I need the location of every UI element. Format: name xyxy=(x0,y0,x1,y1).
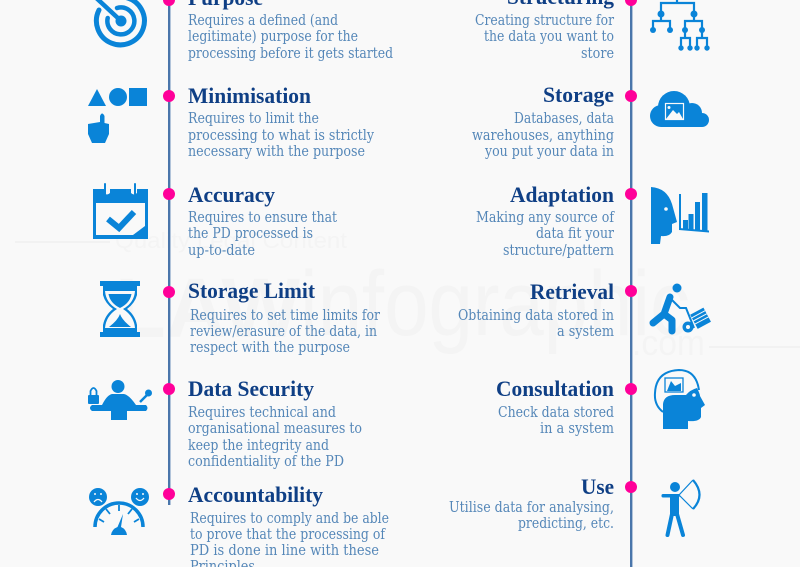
item: Adaptation: Adaptation xyxy=(510,182,614,207)
item: Structuring xyxy=(475,0,615,62)
item: Adaptation: Making any source of xyxy=(476,208,615,226)
item: Purpose: processing before it gets started xyxy=(188,44,393,62)
item: Use xyxy=(449,474,614,532)
item: Storage Limit xyxy=(188,278,381,356)
icon: gauge with faces xyxy=(89,488,149,535)
item: Storage Limit: Storage Limit xyxy=(188,278,315,303)
item: Accountability: Requires to comply and be able xyxy=(190,509,389,527)
item: Accountability: to prove that the processing of xyxy=(190,525,386,543)
item: Accuracy: the PD processed is xyxy=(188,224,313,242)
item: Adaptation xyxy=(476,182,615,259)
item: Consultation: Consultation xyxy=(496,376,614,401)
item: Accountability: Accountability xyxy=(188,482,324,507)
item: Storage: Storage xyxy=(543,82,614,107)
item: Retrieval: Retrieval xyxy=(530,279,614,304)
icon: cloud with image xyxy=(650,91,709,127)
item: Storage Limit: respect with the purpose xyxy=(190,338,350,356)
item: Structuring: store xyxy=(581,44,614,62)
icon: hourglass xyxy=(100,281,140,337)
watermark: .com xyxy=(632,322,705,363)
item: Purpose: legitimate) purpose for the xyxy=(188,27,358,45)
watermark: LAW xyxy=(115,261,301,355)
item: Accuracy xyxy=(188,182,337,259)
item: Retrieval: Obtaining data stored in xyxy=(458,306,614,324)
item: Minimisation: processing to what is strictly xyxy=(188,126,374,144)
item: Adaptation: data fit your xyxy=(536,224,615,242)
left timeline xyxy=(163,0,175,505)
item: Data Security: keep the integrity and xyxy=(188,436,329,454)
item: Use: predicting, etc. xyxy=(518,514,614,532)
item: Data Security: confidentiality of the PD xyxy=(188,452,344,470)
item: Structuring: the data you want to xyxy=(484,27,614,45)
item: Accountability: PD is done in line with these xyxy=(190,541,379,559)
item: Data Security xyxy=(188,376,362,470)
item: Storage: you put your data in xyxy=(484,142,614,160)
item: Minimisation xyxy=(188,83,374,160)
icon: calendar with check xyxy=(93,184,148,239)
item: Data Security: Requires technical and xyxy=(188,403,336,421)
item: Storage xyxy=(472,82,614,160)
right timeline xyxy=(625,0,637,567)
item: Minimisation: Requires to limit the xyxy=(188,109,319,127)
icon: archer xyxy=(662,480,700,535)
item: Accuracy: Requires to ensure that xyxy=(188,208,337,226)
icon: shapes and hand xyxy=(88,88,147,143)
item: Consultation xyxy=(496,376,614,437)
icon: hierarchy tree xyxy=(650,0,710,51)
item: Consultation: in a system xyxy=(540,419,614,437)
item: Use: Utilise data for analysing, xyxy=(449,498,614,516)
item: Consultation: Check data stored xyxy=(498,403,614,421)
item: Storage: warehouses, anything xyxy=(472,126,614,144)
item: Storage Limit: Requires to set time limits for xyxy=(190,306,381,324)
watermark: Quality Legal Content xyxy=(115,228,347,253)
item: Minimisation: Minimisation xyxy=(188,83,311,108)
item: Retrieval xyxy=(458,279,614,340)
item: Minimisation: necessary with the purpose xyxy=(188,142,365,160)
item: Storage: Databases, data xyxy=(514,109,614,127)
item: Adaptation: structure/pattern xyxy=(503,241,614,259)
item: Accountability xyxy=(188,482,389,567)
item: Data Security: organisational measures to xyxy=(188,419,362,437)
watermark: infographic xyxy=(300,253,690,355)
item: Accuracy: Accuracy xyxy=(188,182,276,207)
item: Purpose xyxy=(188,0,393,62)
icon: head with bar chart xyxy=(651,187,709,244)
item: Data Security: Data Security xyxy=(188,376,315,401)
watermark xyxy=(15,228,800,363)
item: Storage Limit: review/erasure of the data, in xyxy=(190,322,377,340)
item: Structuring: Creating structure for xyxy=(475,11,615,29)
icon: person with lock and key xyxy=(88,380,152,420)
icon: target xyxy=(92,0,144,45)
item: Accuracy: up-to-date xyxy=(188,241,255,259)
icon: worker with hand truck xyxy=(653,284,711,332)
item: Use: Use xyxy=(581,474,614,499)
item: Purpose: Requires a defined (and xyxy=(188,11,338,29)
item: Retrieval: a system xyxy=(557,322,614,340)
icon: head with image in thought xyxy=(655,370,705,429)
